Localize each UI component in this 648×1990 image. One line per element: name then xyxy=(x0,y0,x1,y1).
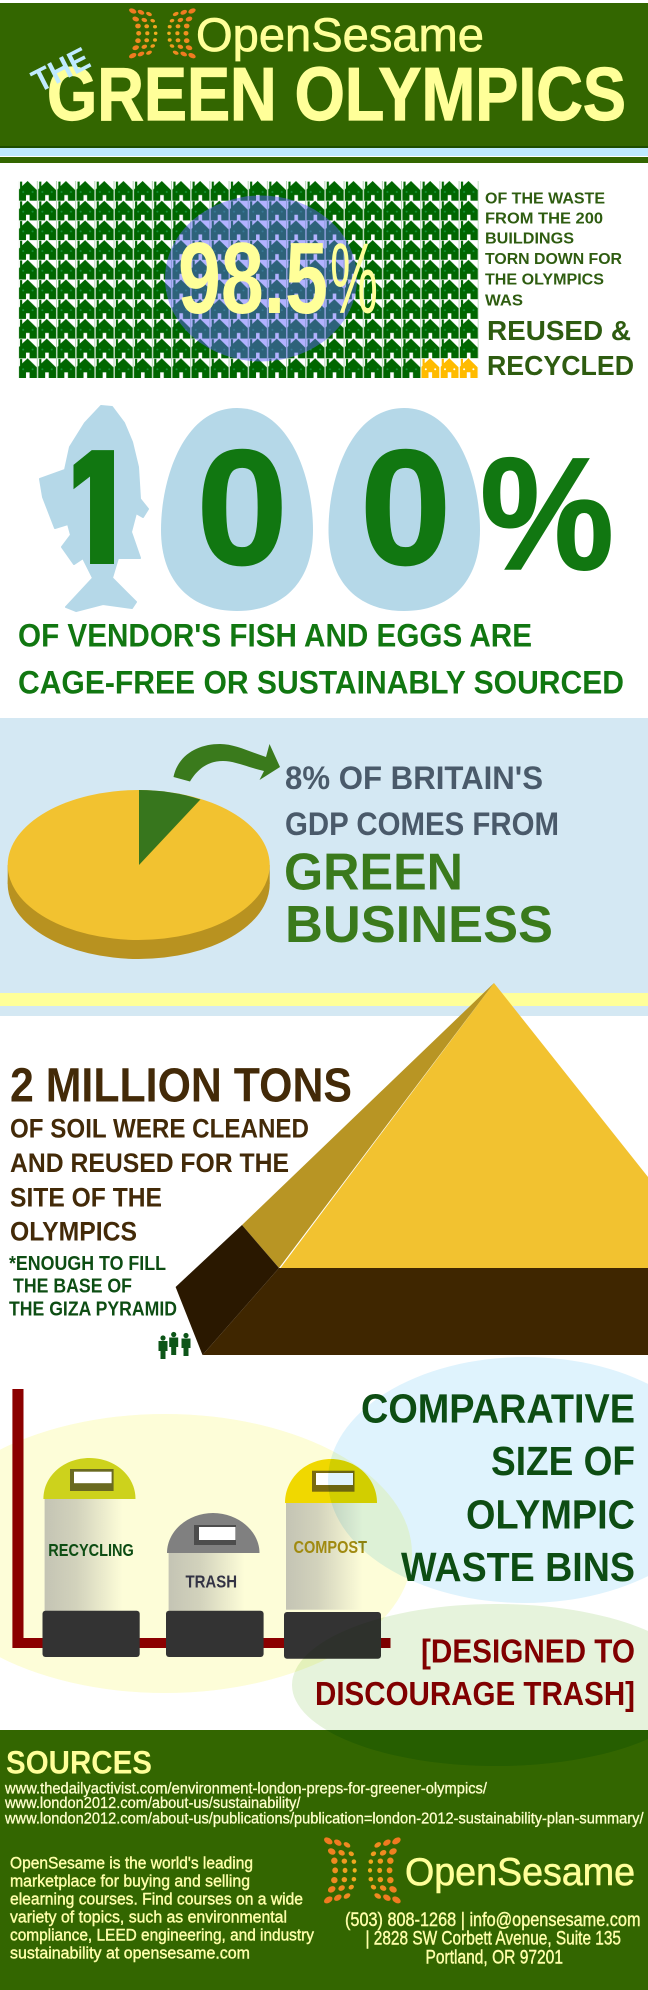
text: soil heading: AND REUSED FOR THE xyxy=(10,1148,289,1178)
bin: recycling xyxy=(42,1458,140,1657)
text: pyramid footnote: *ENOUGH TO FILL xyxy=(9,1253,166,1275)
text: about OpenSesame: OpenSesame is the world's leading xyxy=(10,1853,253,1872)
source links: www.london2012.com/about-us/sustainability/ xyxy=(4,1795,301,1812)
big number: 1 xyxy=(52,408,144,635)
panel: fish and eggs statistic xyxy=(18,406,624,700)
heading: comparative size xyxy=(361,1386,635,1590)
text: GDP share: GREEN xyxy=(284,843,463,901)
logo wordmark: OpenSesame xyxy=(196,8,484,61)
text: waste description: REUSED & xyxy=(487,315,631,346)
text: pyramid footnote: THE BASE OF xyxy=(13,1276,132,1298)
big number: 0 xyxy=(196,416,288,599)
big number: % xyxy=(480,424,614,603)
label: COMPOST xyxy=(294,1537,367,1557)
source links: www.thedailyactivist.com/environment-london-preps-for-greener-olympics/ xyxy=(4,1780,488,1797)
big number: 98.5 xyxy=(178,223,328,335)
text: GDP share: 8% OF BRITAIN'S xyxy=(285,760,543,796)
pipe xyxy=(12,1389,391,1648)
text: GDP share: GDP COMES FROM xyxy=(285,806,559,842)
logo: OpenSesame mark xyxy=(323,1836,402,1905)
text: waste description: TORN DOWN FOR xyxy=(485,251,622,268)
text: soil heading xyxy=(10,1060,352,1247)
text: waste description: RECYCLED xyxy=(487,350,634,381)
big number: 0 xyxy=(360,416,451,599)
logo: OpenSesame mark xyxy=(128,7,197,59)
text: about OpenSesame xyxy=(10,1853,314,1962)
pie chart: 8 percent xyxy=(8,790,270,959)
text: pyramid footnote xyxy=(9,1253,177,1321)
text: soil heading: 2 MILLION TONS xyxy=(10,1060,352,1113)
panel: soil and pyramid statistic xyxy=(9,983,648,1359)
background shape: blue blob xyxy=(328,1357,648,1603)
logo wordmark: OpenSesame xyxy=(405,1851,635,1894)
panel: green business statistic xyxy=(0,718,648,1016)
bin: compost xyxy=(284,1459,381,1659)
text: about OpenSesame: elearning courses. Find courses on a wide xyxy=(10,1889,303,1908)
text: vendor caption xyxy=(18,617,624,700)
icon: three people xyxy=(158,1332,190,1359)
text: about OpenSesame: compliance, LEED engineering, and industry xyxy=(10,1926,314,1945)
text: contact details xyxy=(345,1910,640,1968)
text: soil heading: OLYMPICS xyxy=(10,1217,137,1247)
icon: egg xyxy=(328,408,480,611)
panel: waste bins comparison xyxy=(0,1357,648,1766)
text: soil heading: OF SOIL WERE CLEANED xyxy=(10,1114,309,1144)
text: about OpenSesame: variety of topics, such as environmental xyxy=(10,1907,287,1926)
text: vendor caption: OF VENDOR'S FISH AND EGGS ARE xyxy=(18,617,532,653)
text: GDP share: BUSINESS xyxy=(285,896,553,954)
panel: sources and about footer xyxy=(4,1744,644,1968)
background shape: yellow blob xyxy=(0,1414,412,1693)
text: waste description: OF THE WASTE xyxy=(485,190,605,208)
panel: header banner xyxy=(0,3,648,163)
panel: footer background xyxy=(0,1730,648,1990)
text: waste description: THE OLYMPICS xyxy=(485,271,604,288)
text: waste description: BUILDINGS xyxy=(485,231,574,248)
arrow xyxy=(174,744,280,782)
background shape: green blob xyxy=(292,1604,648,1766)
label: TRASH xyxy=(186,1572,237,1592)
illustration: pyramid xyxy=(176,983,648,1355)
highlight circle xyxy=(165,196,357,362)
heading: sources: SOURCES xyxy=(6,1744,152,1780)
text: waste description: WAS xyxy=(485,292,523,310)
text: pyramid footnote: THE GIZA PYRAMID xyxy=(9,1299,177,1321)
text: about OpenSesame: marketplace for buying and selling xyxy=(10,1872,250,1891)
text: soil heading: SITE OF THE xyxy=(10,1183,162,1213)
label: RECYCLING xyxy=(48,1540,134,1560)
panel: recycled buildings statistic xyxy=(19,181,634,381)
source links xyxy=(4,1780,644,1827)
icon grid: 240 houses xyxy=(19,181,479,378)
text: waste description xyxy=(485,190,634,381)
icon: egg xyxy=(161,408,313,611)
icon: fish xyxy=(40,406,148,611)
big number: % xyxy=(330,223,378,335)
big number xyxy=(74,448,611,571)
text: waste description: FROM THE 200 xyxy=(485,210,603,228)
note: designed to discourage trash xyxy=(315,1632,635,1712)
text: GDP share xyxy=(284,760,559,954)
text: contact details: Portland, OR 97201 xyxy=(426,1947,563,1968)
heading: comparative size: OLYMPIC xyxy=(466,1491,635,1537)
heading: comparative size: SIZE OF xyxy=(491,1438,635,1484)
bin: trash xyxy=(166,1513,264,1657)
text: about OpenSesame: sustainability at opensesame.com xyxy=(10,1943,250,1962)
footer arc overlap xyxy=(327,1730,646,1766)
title: The: THE xyxy=(26,40,96,99)
